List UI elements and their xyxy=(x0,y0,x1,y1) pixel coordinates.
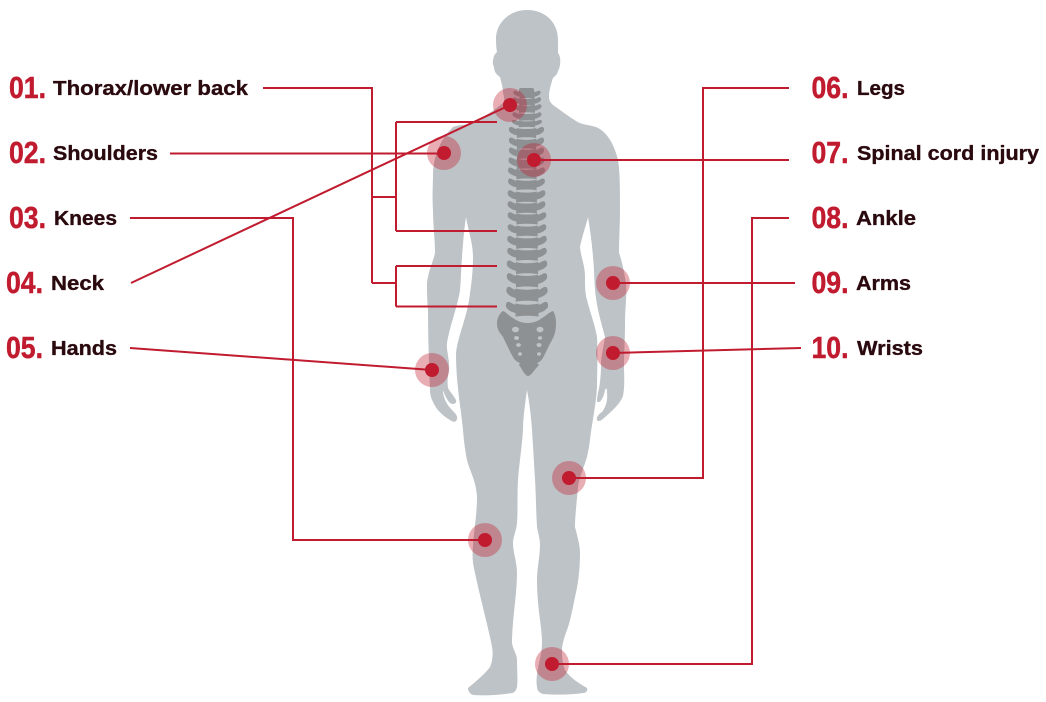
marker: wrists xyxy=(596,336,630,370)
marker: shoulders xyxy=(427,136,461,170)
leader: spinal cord injury xyxy=(534,159,789,161)
label 07: Spinal cord injury xyxy=(857,142,1040,165)
label 01 xyxy=(9,70,249,105)
marker: legs xyxy=(552,461,586,495)
label 05 xyxy=(6,330,117,365)
marker: hands xyxy=(415,353,449,387)
label 05: Hands xyxy=(51,337,117,360)
leader: arms xyxy=(613,282,795,284)
leader: ankle xyxy=(552,218,789,664)
label 08: 08. xyxy=(812,200,848,235)
label 06: 06. xyxy=(812,70,848,105)
label 10: 10. xyxy=(812,330,848,365)
label 04: 04. xyxy=(6,265,43,300)
label 07: 07. xyxy=(812,135,848,170)
label 01: 01. xyxy=(9,70,46,105)
leader: shoulders xyxy=(170,152,444,154)
marker: ankle xyxy=(535,647,569,681)
marker: spinal cord injury xyxy=(517,143,551,177)
leader: hands xyxy=(130,348,432,370)
leader: thorax/lower back bracket xyxy=(263,88,497,306)
leader: legs xyxy=(569,88,789,478)
label 02: Shoulders xyxy=(53,142,158,165)
leader: knees xyxy=(130,218,485,540)
label 02 xyxy=(9,135,158,170)
label 01: Thorax/lower back xyxy=(53,77,249,100)
label 08: Ankle xyxy=(856,207,916,230)
leader lines xyxy=(130,88,801,664)
label 09: 09. xyxy=(812,265,848,300)
label 03 xyxy=(9,200,117,235)
human body silhouette xyxy=(427,10,626,695)
label 07 xyxy=(812,135,1040,170)
label 03: 03. xyxy=(9,200,46,235)
label 02: 02. xyxy=(9,135,46,170)
marker: arms xyxy=(596,266,630,300)
label 08 xyxy=(812,200,916,235)
label 09: Arms xyxy=(856,272,911,295)
label 04 xyxy=(6,265,105,300)
label 10: Wrists xyxy=(857,337,923,360)
label 06: Legs xyxy=(857,77,905,100)
spine xyxy=(497,88,556,376)
label 10 xyxy=(812,330,923,365)
label 04: Neck xyxy=(51,272,105,295)
thoracic vertebrae xyxy=(508,127,546,236)
marker: knees xyxy=(468,523,502,557)
lumbar vertebrae xyxy=(506,236,548,317)
label 05: 05. xyxy=(6,330,43,365)
pelvis xyxy=(497,311,556,376)
leader: wrists xyxy=(613,348,801,353)
marker: neck xyxy=(493,88,527,122)
cervical vertebrae xyxy=(512,88,542,127)
label 06 xyxy=(812,70,905,105)
label 03: Knees xyxy=(54,207,117,230)
label 09 xyxy=(812,265,911,300)
leader: neck xyxy=(131,105,510,283)
